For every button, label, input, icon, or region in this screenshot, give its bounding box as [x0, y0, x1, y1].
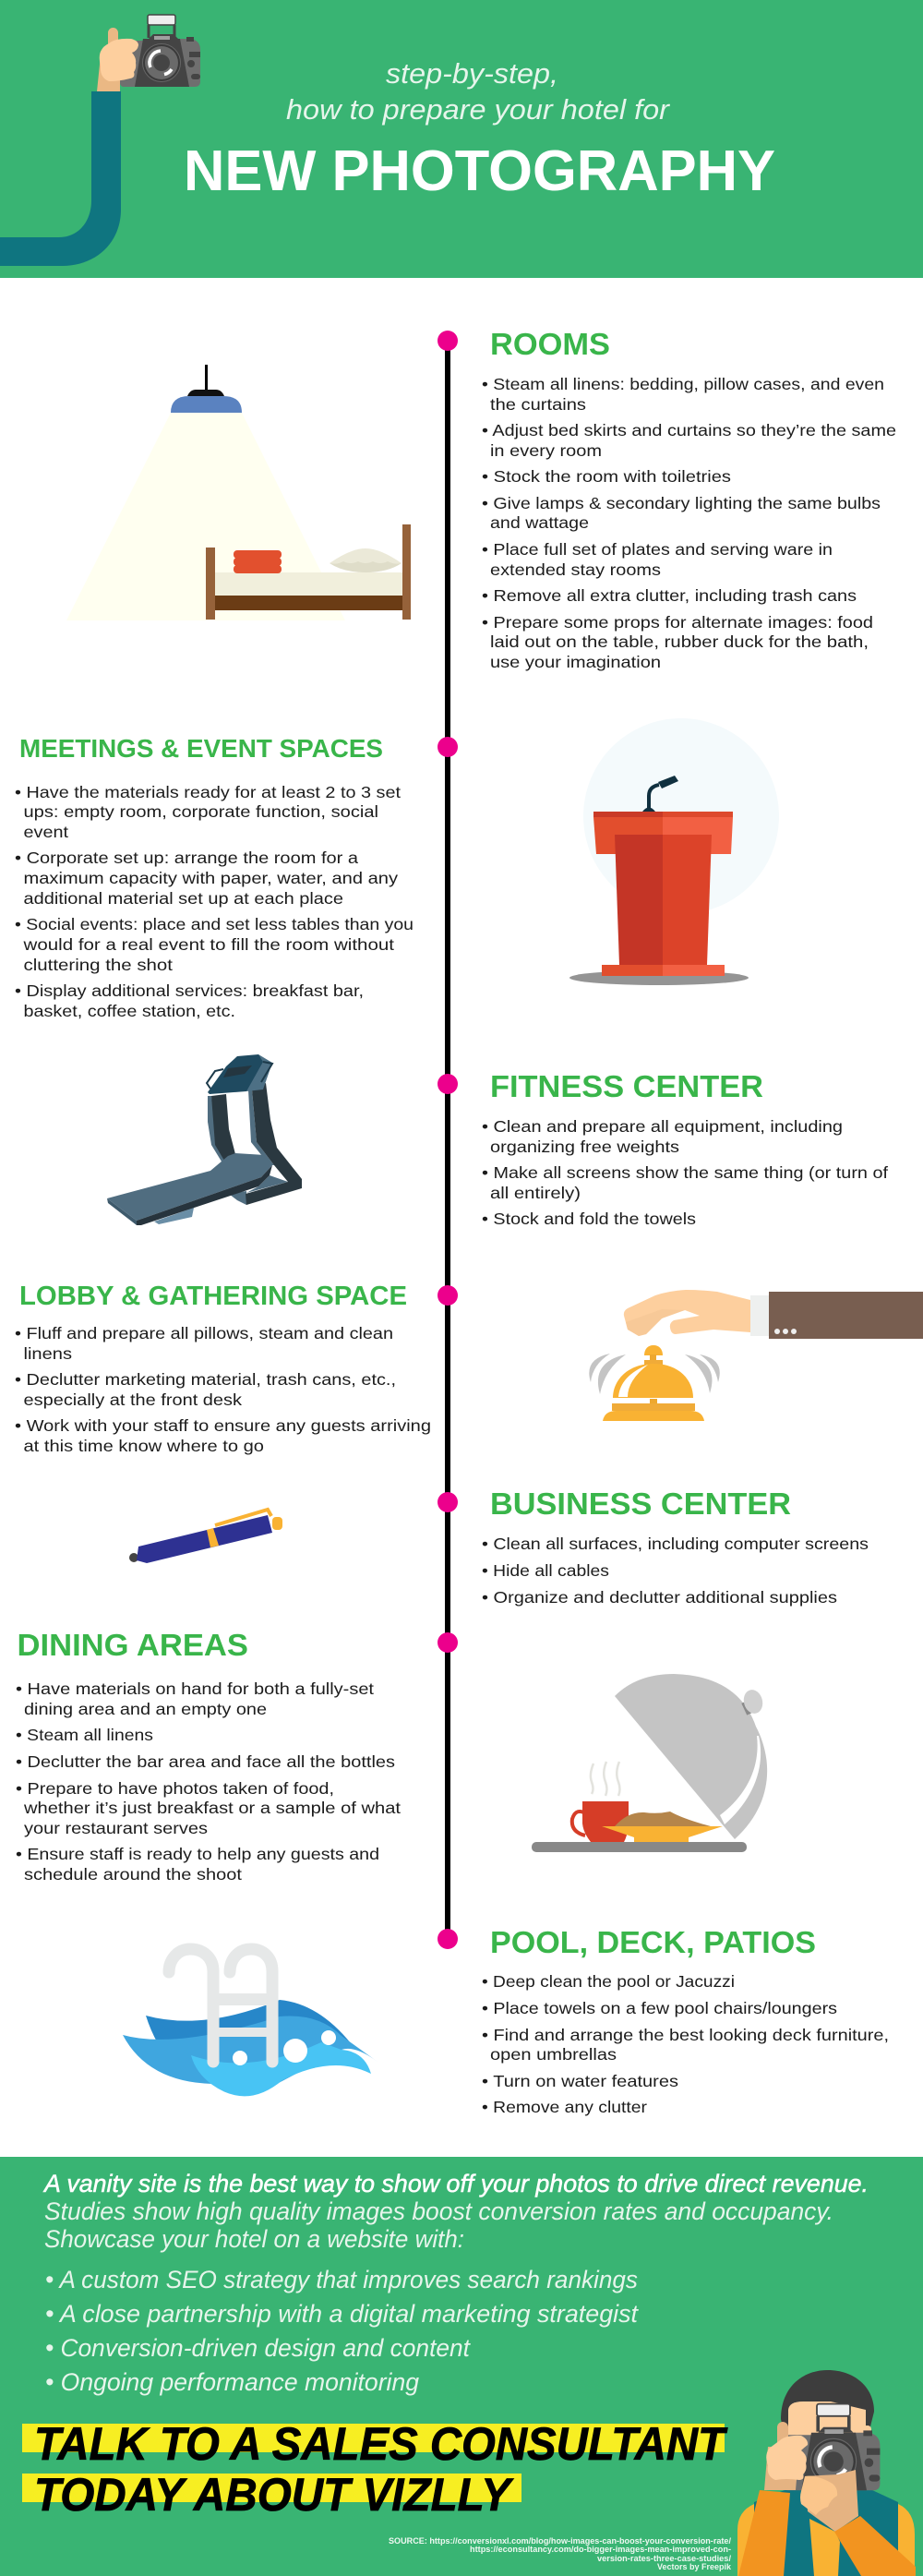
- title intro: [286, 57, 671, 126]
- callout: talk to a sales consultant: TODAY ABOUT VIZLLY: [34, 2469, 514, 2521]
- text block: fitness center: all entirely): [490, 1184, 581, 1202]
- text block: business center: • Clean all surfaces, including computer screens: [482, 1535, 869, 1553]
- text block: meetings: event: [24, 823, 68, 841]
- text block: rooms: • Give lamps & secondary lighting the same bulbs: [482, 494, 881, 512]
- text block: meetings: • Corporate set up: arrange the room for a: [15, 849, 358, 867]
- icon: pool ladder and water: [123, 1949, 378, 2096]
- text block: fitness center: • Clean and prepare all equipment, including: [482, 1117, 843, 1136]
- panel: business center: [129, 1487, 869, 1607]
- heading: pool: POOL, DECK, PATIOS: [490, 1925, 816, 1959]
- text block: dining areas: your restaurant serves: [24, 1819, 208, 1837]
- text block: rooms: [482, 375, 896, 671]
- text block: lobby: [15, 1324, 431, 1455]
- text block: rooms: use your imagination: [490, 653, 661, 671]
- text block: dining areas: schedule around the shoot: [24, 1865, 242, 1884]
- text block: pool: • Find and arrange the best looking deck furniture,: [482, 2026, 889, 2044]
- text block: lobby: • Work with your staff to ensure any guests arriving: [15, 1416, 431, 1435]
- panel: dining areas: [16, 1628, 767, 1884]
- heading: meetings: MEETINGS & EVENT SPACES: [19, 734, 383, 763]
- text block: lobby: especially at the front desk: [24, 1390, 242, 1409]
- text block: rooms: and wattage: [490, 513, 589, 532]
- title: NEW PHOTOGRAPHY: [184, 139, 775, 203]
- text block: lobby: at this time know where to go: [24, 1437, 264, 1455]
- text block: meetings: basket, coffee station, etc.: [24, 1002, 235, 1020]
- text block: lobby: linens: [24, 1344, 72, 1363]
- panel: fitness center: [107, 1054, 888, 1228]
- text block: rooms: • Place full set of plates and serving ware in: [482, 540, 833, 559]
- panel: call to action: [0, 2157, 923, 2576]
- text block: pool: • Turn on water features: [482, 2072, 678, 2090]
- panel: lobby: [15, 1282, 923, 1455]
- text block: lobby: • Fluff and prepare all pillows, steam and clean: [15, 1324, 393, 1342]
- text block: fitness center: [482, 1117, 888, 1228]
- text block: meetings: • Have the materials ready for at least 2 to 3 set: [15, 783, 401, 801]
- text block: meetings: • Social events: place and set less tables than you: [15, 915, 414, 933]
- text block: meetings: • Display additional services: breakfast bar,: [15, 981, 364, 1000]
- heading: business center: BUSINESS CENTER: [490, 1487, 791, 1521]
- text block: fitness center: • Make all screens show the same thing (or turn of: [482, 1163, 888, 1182]
- sources: SOURCE: https://conversionxl.com/blog/how-images-can-boost-your-conversion-rate/: [389, 2536, 731, 2546]
- panel: pool: [123, 1925, 889, 2116]
- sources: Vectors by Freepik: [657, 2562, 732, 2572]
- text block: dining areas: • Have materials on hand for both a fully-set: [16, 1679, 374, 1698]
- text block: pool: [482, 1972, 889, 2116]
- text block: dining areas: • Declutter the bar area and face all the bottles: [16, 1752, 395, 1771]
- text block: dining areas: • Steam all linens: [16, 1726, 153, 1744]
- text block: fitness center: organizing free weights: [490, 1138, 679, 1156]
- text block: rooms: laid out on the table, rubber duck for the bath,: [490, 632, 869, 651]
- text block: rooms: • Remove all extra clutter, including trash cans: [482, 586, 857, 605]
- icon: podium: [569, 718, 779, 985]
- text block: dining areas: • Prepare to have photos taken of food,: [16, 1779, 334, 1798]
- list: website features: • A custom SEO strategy that improves search rankings: [45, 2266, 638, 2293]
- text block: meetings: maximum capacity with paper, water, and any: [24, 869, 398, 887]
- text block: rooms: in every room: [490, 441, 602, 460]
- text block: dining areas: whether it’s just breakfast or a sample of what: [23, 1799, 401, 1817]
- text block: rooms: • Adjust bed skirts and curtains so they’re the same: [482, 421, 896, 439]
- text block: pool: open umbrellas: [490, 2045, 617, 2064]
- heading: dining areas: DINING AREAS: [17, 1628, 248, 1662]
- icon: hand ringing bell: [589, 1290, 923, 1421]
- heading: fitness center: FITNESS CENTER: [490, 1069, 763, 1103]
- text block: pool: • Place towels on a few pool chairs/loungers: [482, 1999, 837, 2017]
- list: website features: • A close partnership with a digital marketing strategist: [45, 2300, 639, 2328]
- heading: lobby: LOBBY & GATHERING SPACE: [19, 1282, 407, 1311]
- icon: lamp and bed: [66, 365, 411, 620]
- icon: photographer: [737, 2370, 916, 2576]
- callout: talk to a sales consultant: [22, 2418, 728, 2521]
- text block: rooms: extended stay rooms: [490, 560, 661, 579]
- text block: fitness center: • Stock and fold the towels: [482, 1210, 696, 1228]
- text block: pool: • Deep clean the pool or Jacuzzi: [482, 1972, 735, 1991]
- timeline: [438, 331, 458, 1949]
- text block: vanity site: Showcase your hotel on a website with:: [44, 2225, 464, 2253]
- text block: dining areas: [16, 1679, 401, 1884]
- header band: [0, 0, 923, 278]
- icon: treadmill: [107, 1054, 302, 1225]
- text block: vanity site: [42, 2170, 869, 2253]
- text block: meetings: cluttering the shot: [24, 956, 173, 974]
- text block: pool: • Remove any clutter: [482, 2098, 647, 2116]
- list: website features: [45, 2266, 639, 2396]
- panel: rooms: [66, 327, 896, 671]
- text block: meetings: [15, 783, 414, 1020]
- text block: vanity site: Studies show high quality images boost conversion rates and occupancy.: [44, 2197, 833, 2225]
- text block: meetings: ups: empty room, corporate function, social: [24, 802, 378, 821]
- sources: [389, 2536, 732, 2572]
- text block: meetings: would for a real event to fill the room without: [22, 935, 394, 954]
- heading: rooms: ROOMS: [490, 327, 610, 361]
- icon: cloche and coffee: [532, 1674, 767, 1852]
- text block: dining areas: • Ensure staff is ready to help any guests and: [16, 1845, 379, 1863]
- text block: business center: • Hide all cables: [482, 1561, 609, 1580]
- text block: dining areas: dining area and an empty one: [24, 1700, 267, 1718]
- sources: https://econsultancy.com/do-bigger-images-mean-improved-con-: [470, 2545, 731, 2555]
- text block: lobby: • Declutter marketing material, trash cans, etc.,: [15, 1370, 396, 1389]
- list: website features: • Ongoing performance monitoring: [45, 2368, 419, 2396]
- text block: business center: • Organize and declutter additional supplies: [482, 1588, 837, 1607]
- text block: business center: [482, 1535, 869, 1607]
- icon: arm holding camera: [0, 15, 200, 266]
- text block: vanity site: A vanity site is the best way to show off your photos to drive direct revenue.: [42, 2170, 869, 2197]
- text block: rooms: the curtains: [490, 395, 586, 414]
- text block: rooms: • Prepare some props for alternate images: food: [482, 613, 873, 632]
- title intro: how to prepare your hotel for: [286, 93, 671, 126]
- text block: rooms: • Stock the room with toiletries: [482, 467, 731, 486]
- title intro: step-by-step,: [386, 57, 558, 90]
- icon: pen: [129, 1510, 282, 1563]
- text block: rooms: • Steam all linens: bedding, pillow cases, and even: [482, 375, 884, 393]
- panel: meetings: [15, 718, 779, 1020]
- list: website features: • Conversion-driven design and content: [45, 2334, 471, 2362]
- sources: version-rates-three-case-studies/: [597, 2554, 731, 2564]
- text block: meetings: additional material set up at each place: [24, 889, 343, 908]
- callout: talk to a sales consultant: TALK TO A SALES CONSULTANT: [34, 2418, 728, 2470]
